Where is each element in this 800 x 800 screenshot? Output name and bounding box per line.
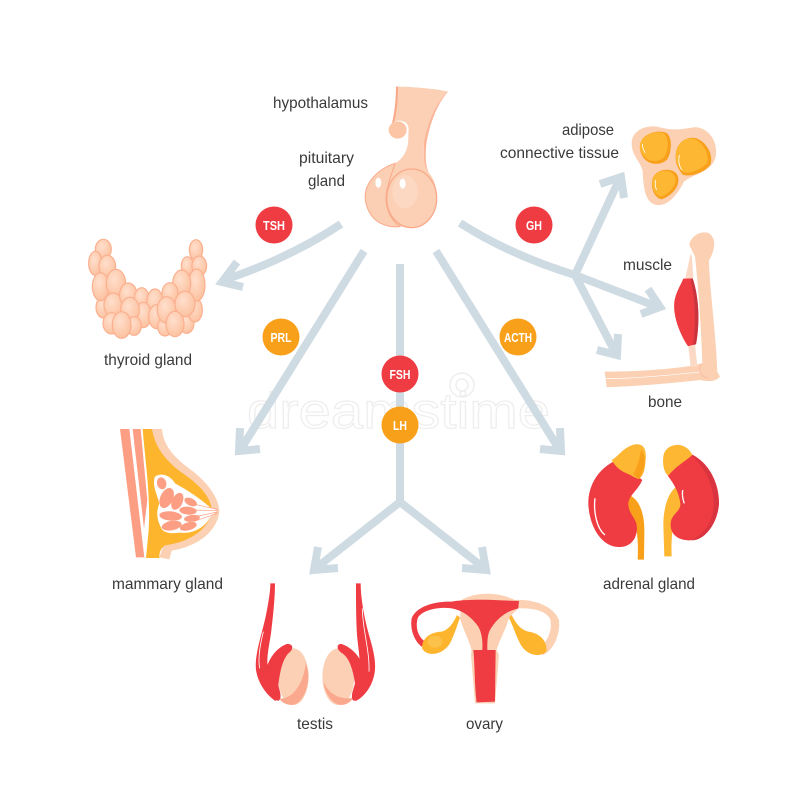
label: thyroid gland: thyroid gland xyxy=(104,352,192,369)
icon: testis xyxy=(256,583,375,705)
label: adipose connective tissue xyxy=(500,122,619,162)
label: adipose connective tissue: connective tissue xyxy=(500,145,619,162)
badge: FSH xyxy=(382,356,418,392)
badge: TSH: TSH xyxy=(263,218,285,233)
icon: adipose tissue xyxy=(632,126,716,205)
badge: GH: GH xyxy=(526,218,542,233)
icon: thyroid gland xyxy=(89,239,207,338)
label: adrenal gland: adrenal gland xyxy=(603,576,695,593)
label: muscle: muscle xyxy=(623,257,672,274)
arrow: TSH to thyroid xyxy=(222,224,341,287)
watermark: dreamstime xyxy=(247,383,550,439)
badge: FSH: FSH xyxy=(390,367,410,382)
arrow: PRL to mammary gland xyxy=(239,251,364,451)
label: pituitary gland xyxy=(299,150,354,190)
label: ovary: ovary xyxy=(466,716,503,733)
arrow: FSH and LH to testis and ovary xyxy=(314,264,486,570)
badge: ACTH xyxy=(500,318,536,356)
arrow: ACTH to adrenal gland xyxy=(436,251,561,451)
label: hypothalamus: hypothalamus xyxy=(273,95,368,112)
icon: ovary and uterus xyxy=(411,594,559,703)
icon: hypothalamus and pituitary gland xyxy=(365,87,448,228)
badge: TSH xyxy=(256,206,292,244)
badge: PRL xyxy=(262,318,300,356)
label: pituitary gland: gland xyxy=(308,173,345,190)
badge: PRL: PRL xyxy=(270,330,292,345)
arrow: GH to adipose, muscle and bone xyxy=(460,177,660,355)
label: mammary gland: mammary gland xyxy=(112,576,223,593)
badge: LH xyxy=(382,406,418,444)
label: testis: testis xyxy=(297,716,333,733)
icon: adrenal gland and kidneys xyxy=(588,444,719,560)
icon: mammary gland xyxy=(120,429,219,559)
badge: LH: LH xyxy=(393,418,407,433)
badge: ACTH: ACTH xyxy=(504,330,532,345)
label: bone: bone xyxy=(648,394,682,411)
icon: muscle and bone xyxy=(605,232,720,387)
label: adipose connective tissue: adipose xyxy=(562,122,614,139)
label: pituitary gland: pituitary xyxy=(299,150,354,167)
badge: GH xyxy=(516,206,552,244)
